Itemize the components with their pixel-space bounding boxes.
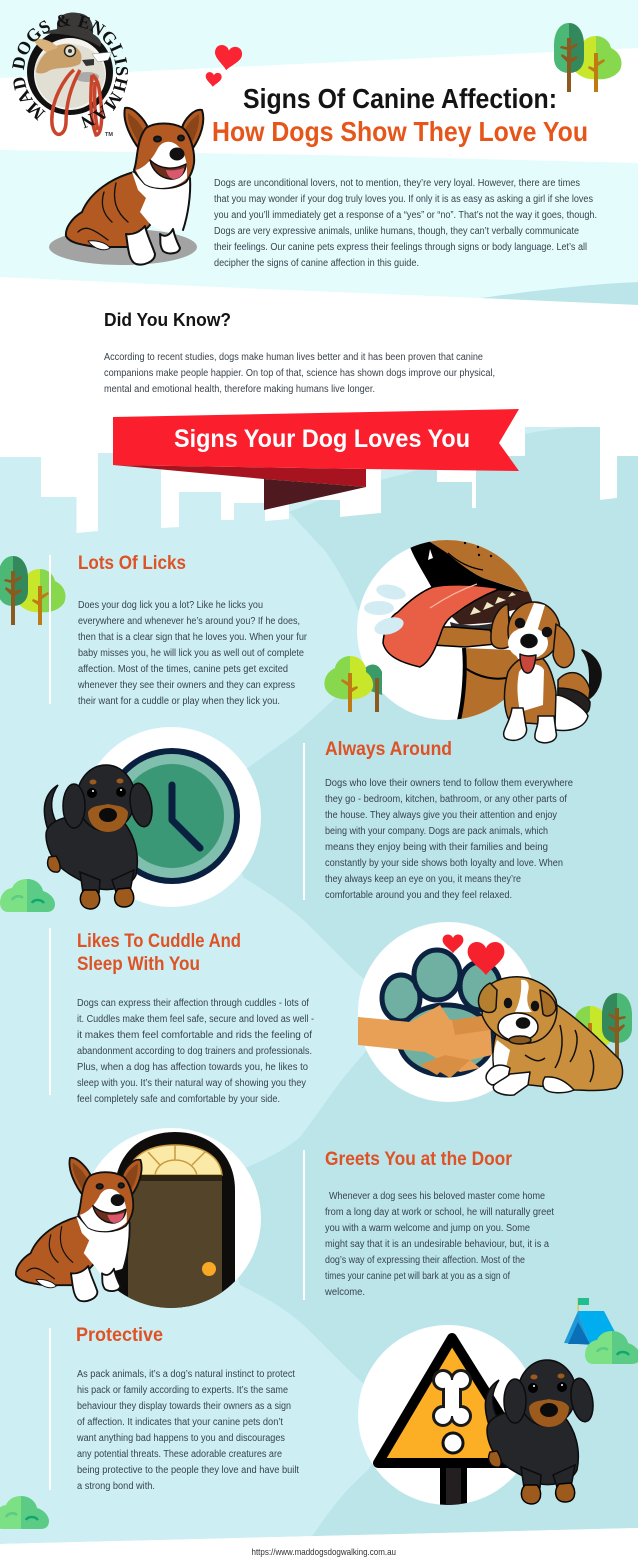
paragraph: everywhere and whenever he’s around you? If he does, xyxy=(78,616,300,627)
paragraph: comfortable around you and they feel relaxed. xyxy=(325,890,512,901)
paragraph: Does your dog lick you a lot? Like he licks you xyxy=(78,600,263,611)
bush xyxy=(0,879,55,912)
paragraph: dog’s way of expressing their affection. Most of the xyxy=(325,1255,525,1266)
door xyxy=(115,1132,235,1320)
section: always around xyxy=(0,727,573,912)
illustration: paw, hands, hearts and bulldog xyxy=(358,922,632,1102)
tree pair xyxy=(324,656,382,712)
did you know heading: Did You Know? xyxy=(104,310,231,330)
white rule xyxy=(49,1328,51,1490)
paragraph: abandonment according to dog trainers and professionals. xyxy=(77,1046,312,1057)
bush bottom left xyxy=(0,1496,49,1529)
paragraph: Plus, when a dog has affection towards you, he likes to xyxy=(77,1062,308,1073)
title: Signs Of Canine Affection: xyxy=(243,83,557,114)
section: greets you at the door xyxy=(16,1128,554,1320)
heading: Lots Of Licks xyxy=(78,552,186,574)
white rule xyxy=(303,1150,305,1300)
hearts above title xyxy=(205,44,243,87)
dot xyxy=(443,1433,463,1453)
paragraph: the house. They always give you their attention and enjoy xyxy=(325,810,557,821)
paragraph: of affection. It indicates that your canine pets don’t xyxy=(77,1417,283,1428)
paragraph: want anything bad happens to you and discourages xyxy=(76,1433,285,1444)
did you know paragraph: companions make people happier. On top of that, science has shown dogs improve our physical, xyxy=(104,368,495,379)
bush right xyxy=(585,1331,638,1364)
paragraph xyxy=(77,998,314,1105)
paragraph: might say that it is an undesirable behaviour, but, it is a xyxy=(325,1239,549,1250)
paragraph: from a long day at work or school, he will naturally greet xyxy=(325,1207,554,1218)
logo: Mad Dogs & Englishman xyxy=(12,12,128,138)
paw xyxy=(382,950,500,1075)
paragraph: they go - bedroom, kitchen, bathroom, or any other parts of xyxy=(325,794,567,805)
paragraph: welcome. xyxy=(324,1287,365,1298)
paragraph xyxy=(324,1191,554,1298)
paragraph xyxy=(77,600,308,707)
paragraph: feel completely safe and comfortable by your side. xyxy=(77,1094,280,1105)
heading: Always Around xyxy=(325,738,452,760)
corgi with shadow xyxy=(49,108,203,265)
paragraph: Dogs can express their affection through cuddles - lots of xyxy=(77,998,309,1009)
intro paragraph: their feelings. Our canine pets express their feelings through signs or body language. Let’s all xyxy=(214,242,587,253)
white rule xyxy=(303,743,305,900)
ribbon banner: Signs Your Dog Loves You xyxy=(174,425,470,453)
paragraph: baby misses you, he will lick you as well out of complete xyxy=(78,648,304,659)
bone xyxy=(435,1372,469,1424)
clock xyxy=(104,748,240,884)
white rule xyxy=(49,928,51,1095)
section: lots of licks xyxy=(0,535,601,743)
paragraph xyxy=(325,778,573,901)
did you know paragraph: mental and emotional health, therefore making humans live longer. xyxy=(104,384,375,395)
paragraph: whenever they see their owners and they can express xyxy=(77,680,295,691)
heading: Greets You at the Door xyxy=(325,1148,512,1170)
beagle xyxy=(491,602,601,743)
did you know paragraph: According to recent studies, dogs make human lives better and it has been proven that canine xyxy=(104,352,483,363)
trees left xyxy=(0,556,66,625)
footer url: https://www.maddogsdogwalking.com.au xyxy=(252,1547,396,1557)
paragraph: his pack or family according to experts. It’s the same xyxy=(77,1385,288,1396)
intro paragraph: decipher the signs of canine affection in this guide. xyxy=(214,258,419,269)
logo bowler hat xyxy=(43,12,101,47)
paragraph: a strong bond with. xyxy=(77,1481,155,1492)
trees top right xyxy=(554,23,622,92)
title: How Dogs Show They Love You xyxy=(212,116,588,147)
trademark: TM xyxy=(105,132,113,138)
hearts xyxy=(443,935,504,975)
tongue xyxy=(383,585,497,667)
paragraph: times your canine pet will bark at you as a sign of xyxy=(325,1271,510,1282)
illustration: door and corgi xyxy=(16,1128,261,1320)
paragraph: then that is a clear sign that he loves you. When your fur xyxy=(78,632,308,643)
paragraph: Whenever a dog sees his beloved master come home xyxy=(329,1191,545,1202)
paragraph: behaviour they display towards their owners as a sign xyxy=(77,1401,291,1412)
title xyxy=(212,83,588,147)
dachshund xyxy=(44,765,155,909)
paragraph: any potential threats. These adorable creatures are xyxy=(77,1449,282,1460)
ribbon banner xyxy=(113,409,519,510)
paragraph: it makes them feel comfortable and rids the feeling of xyxy=(77,1030,312,1041)
illustration: big dog licking beagle xyxy=(324,535,601,743)
heading: Sleep With You xyxy=(77,953,200,975)
paragraph: being with your company. Dogs are pack animals, which xyxy=(325,826,548,837)
paragraph: you with a warm welcome and jump on you. Some xyxy=(325,1223,530,1234)
illustration: clock and dachshund xyxy=(0,727,261,912)
intro paragraph: Dogs are very expressive animals, unlike humans, though, they can’t verbally communicate xyxy=(214,226,579,237)
heading: Protective xyxy=(76,1324,163,1346)
paragraph: constantly by your side shows both loyalty and love. When xyxy=(325,858,563,869)
paragraph xyxy=(76,1369,299,1492)
paragraph: it. Cuddles make them feel safe, secure and loved as well - xyxy=(77,1014,314,1025)
intro paragraph: that you may wonder if your dog truly loves you. If only it is as easy as asking a girl if she loves xyxy=(214,194,593,205)
paragraph: Dogs who love their owners tend to follow them everywhere xyxy=(325,778,573,789)
warning sign xyxy=(440,1468,467,1505)
logo ring text: MAD DOGS & ENGLISHMAN xyxy=(12,14,128,128)
paragraph: they always keep an eye on you, it means they’re xyxy=(325,874,521,885)
did you know paragraph xyxy=(104,352,495,395)
heading xyxy=(77,930,241,975)
corgi xyxy=(16,1158,142,1301)
paragraph: means they enjoy being with their families and being xyxy=(325,842,548,853)
trees xyxy=(564,993,632,1062)
logo leash xyxy=(52,70,102,135)
paragraph: sleep with you. It’s their natural way of showing you they xyxy=(77,1078,306,1089)
white rule xyxy=(49,555,51,704)
paragraph: As pack animals, it’s a dog’s natural instinct to protect xyxy=(77,1369,295,1380)
bulldog xyxy=(478,977,623,1095)
dachshund xyxy=(485,1360,596,1504)
section: protective xyxy=(0,1298,638,1529)
illustration: warning sign and dachshund xyxy=(358,1325,596,1510)
paragraph: their want for a cuddle or play when they lick you. xyxy=(78,696,280,707)
section: likes to cuddle xyxy=(49,922,632,1105)
intro paragraph: Dogs are unconditional lovers, not to mention, they’re very loyal. However, there are times xyxy=(214,178,580,189)
tent xyxy=(564,1298,616,1345)
paragraph: affection. Most of the times, canine pets get excited xyxy=(78,664,288,675)
intro paragraph xyxy=(214,178,597,269)
paragraph: being protective to the people they love and have built xyxy=(77,1465,299,1476)
hands xyxy=(358,1005,492,1078)
intro paragraph: you and you’ll immediately get a response of a “yes” or “no”. That’s not the way it goes, though. xyxy=(214,210,597,221)
heading: Likes To Cuddle And xyxy=(77,930,241,952)
